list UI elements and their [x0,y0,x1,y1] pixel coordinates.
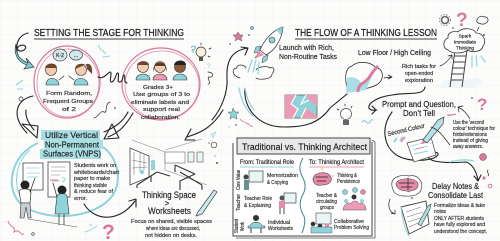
arrow: VNPS to thinking space [84,199,136,217]
text: form random: Form Random, [46,91,93,97]
decoration: flower and marks near delay notes [450,154,492,188]
row: teacher and circulating groups: Teacher & [316,193,337,199]
row: teacher and circulating groups [316,188,366,211]
row: collaborative problem solving: Collaborative [334,219,364,225]
heading: thinking space over worksheets: Thinking Space [142,190,196,200]
decoration: teal streaks and stars [228,88,254,128]
icon: decorative marks top left [16,45,116,118]
icon: notebook and pen [401,201,431,236]
row: teacher and circulating groups: circulating [316,199,337,205]
row labels: Work [240,222,246,231]
row: collaborative problem solving [311,213,369,233]
icon: spark thinking cloud: Thinking [456,46,474,52]
text: focus on shared spaces: not hidden on desks. [145,233,197,239]
text: grades 3+: eliminate labels and [131,100,189,106]
row labels: Core Value [236,170,242,190]
text: VNPS description: Students work on [74,163,116,169]
heading: comparison title [237,138,370,154]
column heading: to thinking architect: To: Thinking Architect [309,160,364,166]
text: launch with rich tasks [279,43,337,61]
icon: three students [136,60,187,80]
icon: spark thinking cloud [444,29,485,53]
column heading: from traditional role: From: Traditional Role [240,160,295,166]
text: second colour technique: colour' technique for [453,126,495,132]
row: thinking and persistence: Thinking & [337,173,357,179]
row: teacher role: Teacher Role [244,196,272,202]
text: launch with rich tasks: Non-Routine Tasks [279,52,337,61]
row labels: Student [234,219,240,233]
text: launch with rich tasks: Launch with Rich, [279,43,334,52]
text: low floor high ceiling: Low Floor / High Ceiling [358,48,431,57]
illustration: student at whiteboard [19,162,77,227]
heading: prompt and question: Prompt and Question, [382,100,456,109]
text: formalize ideas: Formalize ideas & take [434,203,485,209]
icon: brain thought cloud [392,175,422,199]
icon: pencil [196,190,217,216]
heading: delay notes: Consolidate Last [428,191,484,200]
heading: setting the stage: SETTING THE STAGE FOR THINKING [34,28,184,39]
text: second colour technique [453,120,495,150]
decoration: small marks near classroom [208,132,218,164]
text: form random: of 2 [62,107,76,113]
text: rich tasks [402,64,436,84]
heading: utilize vertical [40,130,103,159]
icon: curly connector [98,72,127,83]
text: grades 3+: support real [143,107,180,113]
icon: lightbulb with question mark [190,43,213,84]
icon: rocket [254,27,283,63]
text: second colour technique: hints/extensions [453,132,487,138]
arrow: black curve up to rocket [212,47,248,120]
text: second colour technique: Use the 'second [453,120,484,126]
decoration: bottom left confetti and question mark [8,221,115,241]
icon: pink star and dots [229,26,254,45]
text: VNPS description: thinking visible [74,183,107,189]
illustration: ladder to cloud [440,29,485,88]
text: VNPS description: paper to make [74,176,110,182]
panel: traditional vs thinking architect [233,138,375,238]
icon: dots speech bubble: ... [74,53,78,59]
text: rich tasks: exploration [405,78,433,84]
icon: pink question and arrow [458,95,487,119]
heading: delay notes [428,182,484,200]
illustration: low floor hill [346,62,392,93]
heading: utilize vertical: Surfaces (VNPS) [43,150,101,158]
row labels: Teacher [236,194,242,211]
icon: gear, question mark and small cloud: ? [456,10,468,31]
icon: spark thinking cloud: Immediate [454,40,477,46]
panel: groups of three [122,48,200,121]
icon: smoke clouds [233,60,274,79]
text: form random [43,91,93,113]
icon: K-2 speech bubble: K-2 [56,53,64,59]
heading: thinking space over worksheets [142,190,196,216]
row: memorization: Memorization [267,173,298,179]
illustration: pen and second colour paper [394,114,456,162]
icon: gear, question mark and small cloud [440,10,488,36]
text: formalize ideas: have fully explored and [434,222,485,228]
text: VNPS description [73,163,120,202]
text: grades 3+: collaboration. [141,115,181,121]
text: VNPS description: whiteboards/chart [73,170,120,176]
arrow: curve under zigzag to low floor [245,88,347,127]
heading: delay notes: Delay Notes & [432,182,479,191]
text: focus on shared spaces [131,219,212,239]
row: individual worksheets: Worksheets [268,226,293,232]
heading: prompt and question [382,100,456,118]
heading: prompt and question: Don't Tell [403,109,435,118]
text: formalize ideas [434,203,487,235]
panel: groups of two [34,46,100,118]
icon: zigzag task card [285,95,317,118]
text: formalize ideas: notes [434,209,446,215]
heading: utilize vertical: Non-Permanent [45,140,100,150]
text: focus on shared spaces: where ideas are discussed, [145,226,200,232]
row: memorization [244,171,298,190]
text: formalize ideas: understood the concept. [434,229,487,235]
arrow: big arc from prompt to delay notes [385,112,481,181]
panel: vertical non-permanent surfaces [12,130,120,227]
icon: two children [45,64,92,85]
text: second colour technique: away answers. [453,144,483,150]
arrow: right hollow arrow to VNPS [104,112,133,139]
arrow: rich tasks to ladder [440,55,485,67]
text: rich tasks: open-ended [405,71,433,77]
icon: pink question and arrow: ? [477,95,487,114]
text: formalize ideas: ONLY AFTER students [434,216,484,222]
row: teacher role: & Explaining [244,203,271,209]
row: collaborative problem solving: Problem Solving [334,225,369,231]
arrow: brain to notebook [389,199,395,214]
arrow: long curve to prompt and question [369,87,425,114]
text: focus on shared spaces: Focus on shared, visible spaces [131,219,212,225]
text: VNPS description: & reduce fear of [74,189,114,195]
heading: comparison title: Traditional vs. Thinking Architect [242,142,367,152]
text: grades 3+: Grades 3+ [143,85,173,91]
heading: flow of a thinking lesson: THE FLOW OF A THINKING LESSON [295,28,437,39]
row: thinking and persistence [313,168,360,185]
row: individual worksheets: Individual [268,220,290,226]
text: grades 3+: Use groups of 3 to [133,92,190,98]
icon: spark thinking cloud: Spark [459,34,472,40]
row: individual worksheets [248,215,293,233]
text: form random: Frequent Groups [43,99,93,105]
arrow: curve from grades panel to thinking space [185,110,223,140]
icon: lightbulb and squiggle [337,104,373,125]
arrow: left hollow arrow to VNPS [17,96,38,138]
text: second colour label: Second Colour [387,123,425,138]
icon: lightbulb with question mark: ? [190,44,197,56]
row labels [234,170,246,233]
text: rich tasks: Rich tasks for [402,64,436,70]
heading: thinking space over worksheets: > [165,199,170,208]
icon: lightbulb with question mark: ? [207,64,211,70]
row: teacher role [244,193,296,214]
text: grades 3+ [131,85,190,121]
icon: opening swirl arrow [15,33,34,69]
row: thinking and persistence: Persistence [337,179,360,185]
row: teacher and circulating groups: groups [320,205,334,211]
illustration: classroom [130,139,207,190]
text: VNPS description: error. [74,196,87,202]
heading: thinking space over worksheets: Worksheets [148,206,191,216]
text: second colour technique: instead of giving [453,138,488,144]
row: memorization: & Copying [267,180,288,186]
heading: utilize vertical: Utilize Vertical [45,131,98,140]
